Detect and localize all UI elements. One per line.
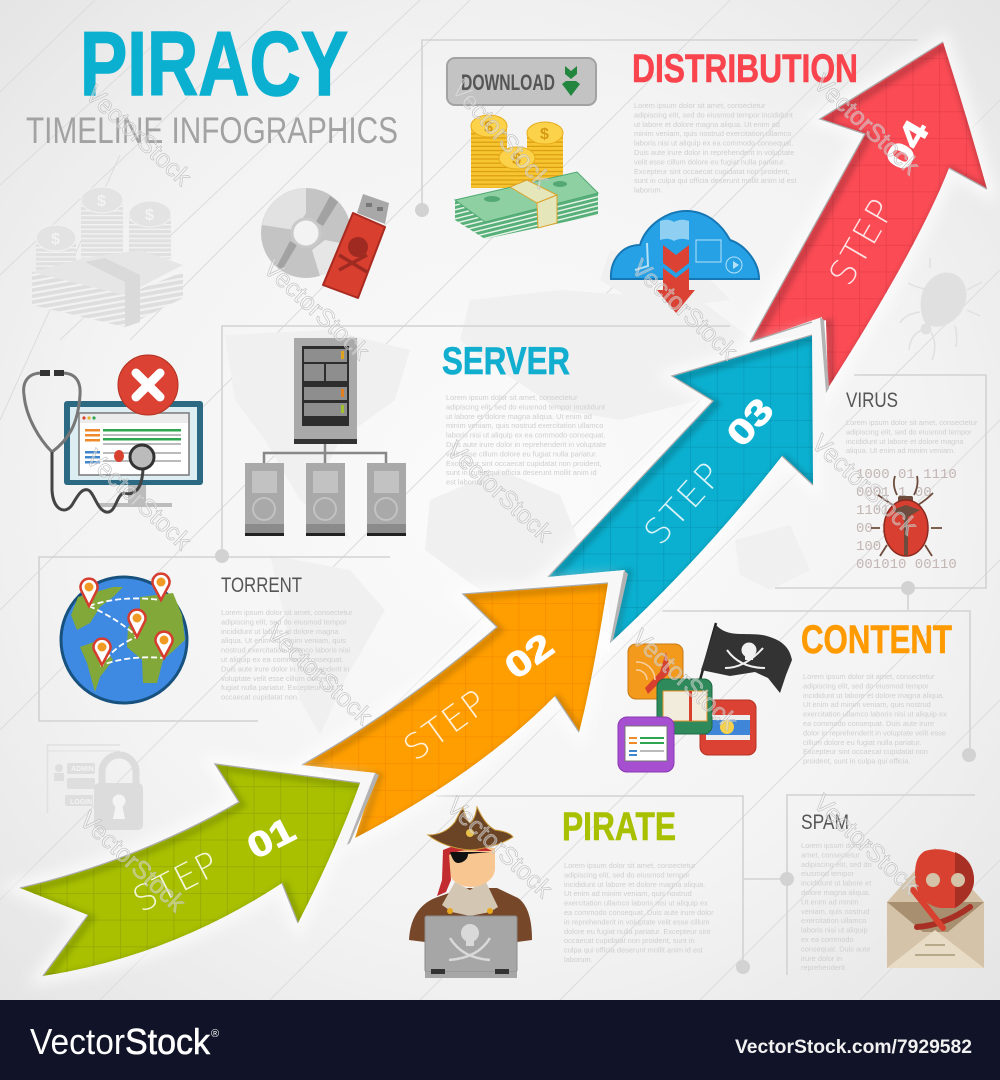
text: pirate: dolore eu fugiat nulla pariatur. Excepteur sint (564, 927, 710, 936)
text: server: sunt in culpa qui officia deserunt mollit anim id (446, 468, 597, 477)
text: torrent: aliqua. Ut enim ad minim veniam, quis (221, 636, 346, 645)
ghost icon: money (32, 187, 183, 327)
text: torrent: Lorem ipsum dolor sit amet, consectetur (221, 608, 353, 617)
watermarks: VectorStock (441, 436, 558, 548)
watermarks: VectorStock (80, 444, 197, 556)
usb (323, 194, 389, 298)
watermarks (74, 69, 925, 918)
text: distribution: Excepteur sint occaecat cupidatat non proident, (634, 167, 790, 176)
coins: $ (484, 119, 493, 136)
subtitle: TIMELINE INFOGRAPHICS (26, 110, 398, 151)
text: server: Duis aute irure dolor in reprehenderit in voluptate (446, 440, 606, 449)
text: content: dolor in reprehenderit in voluptate velit esse (803, 728, 946, 737)
watermarks: VectorStock (626, 624, 743, 736)
text: server: Excepteur sint occaecat cupidatat non proident, (446, 459, 602, 468)
arrow: step 01 green (15, 760, 379, 980)
heading: spam: SPAM (801, 811, 849, 834)
watermarks: VectorStock (74, 806, 191, 918)
step number: 01 (241, 810, 301, 867)
map pins (80, 574, 172, 665)
pirate hat (428, 807, 513, 850)
icon: pirate flag (700, 623, 792, 693)
text: content: proident, sunt in culpa qui officia. (803, 757, 911, 766)
step number: 03 (719, 391, 782, 454)
text: spam: exercitation ullamco (801, 916, 866, 925)
text: virus: aliqua. Ut enim ad minim veniam. (846, 446, 955, 455)
app: video (700, 700, 756, 755)
arrow: step 02 orange (295, 570, 628, 845)
text: distribution: minim veniam, quis nostrud exercitation ullamco (634, 129, 791, 138)
binary code: 1101 010 (856, 503, 923, 519)
footer bar (0, 1000, 1000, 1080)
text: spam: reprehenderit. (801, 963, 847, 972)
icon: download button: DOWNLOAD (461, 70, 555, 95)
footer bar: VectorStock.com/7929582 (735, 1037, 972, 1058)
text: spam: incididunt ut labore et (801, 879, 871, 888)
watermarks: VectorStock (808, 789, 925, 901)
text: pirate: ea commodo consequat. Duis aute irure dolor (564, 908, 714, 917)
watermarks: VectorStock (441, 792, 558, 904)
step label: STEP (637, 456, 730, 553)
text: distribution: Duis aute irure dolor in reprehenderit in voluptate (634, 148, 794, 157)
text: torrent: occaecat cupidatat non. (221, 693, 299, 702)
binary code: 001010 00110 (856, 557, 957, 573)
text: server: minim veniam, quis nostrud exercitation ullamco (446, 421, 603, 430)
text: spam: irure dolor in (801, 954, 842, 963)
heading: server: SERVER (442, 340, 570, 383)
text: pirate: Ut enim ad minim veniam, quis nostrud (564, 889, 692, 898)
text: content: Lorem ipsum dolor sit amet, consectetur (803, 672, 935, 681)
text: virus: Lorem ipsum dolor sit amet, consectetur (846, 418, 978, 427)
text: pirate: laborum. (564, 955, 593, 964)
text: server: Lorem ipsum dolor sit amet, consectetur (446, 393, 578, 402)
text: server: adipiscing elit, sed do eiusmod tempor incididunt (446, 402, 605, 411)
watermarks: VectorStock (808, 69, 925, 181)
text: pirate: Lorem ipsum dolor sit amet, consectetur (564, 861, 696, 870)
text: spam: adipiscing elit, sed do (801, 860, 872, 869)
app: book (657, 679, 712, 734)
text: content: adipiscing elit, sed do eiusmod tempor (803, 681, 929, 690)
text: virus: adipiscing elit, sed do eiusmod tempor (846, 427, 972, 436)
watermarks: VectorStock (626, 254, 743, 366)
title: PIRACY (80, 14, 348, 115)
icon: cd and usb with skull (261, 188, 389, 298)
heading: pirate: PIRATE (562, 805, 676, 849)
ghost icon: money: $ (51, 231, 60, 248)
text: content: exercitation ullamco laboris nisi ut aliquip ex (803, 710, 947, 719)
ghost icon: login lock (48, 745, 143, 830)
text: distribution: Lorem ipsum dolor sit amet, consectetur (634, 101, 766, 110)
ghost icon: login lock: ADMIN (71, 766, 94, 773)
app: browser (618, 717, 674, 772)
text: pirate: occaecat cupidatat non proident, sunt in (564, 936, 695, 945)
text: content: ea commodo consequat. Duis aute irure (803, 719, 934, 728)
app: audio (628, 644, 683, 699)
coins: $ (512, 151, 521, 168)
icon: download button (447, 58, 596, 105)
icon: torrent globe (61, 574, 187, 703)
text: pirate: adipiscing elit, sed do eiusmod tempor (564, 870, 690, 879)
text: virus: incididunt ut labore et dolore magna (846, 437, 964, 446)
binary code: 00 1000 (856, 521, 915, 537)
text: spam: laboris nisi ut aliquip (801, 926, 868, 935)
text: pirate: culpa qui officia deserunt mollit anim id est (564, 946, 703, 955)
step label: STEP (127, 845, 225, 921)
footer bar: Stock (125, 1021, 211, 1062)
text: torrent: fugiat nulla pariatur. Excepteur sint (221, 683, 334, 692)
icon: cloud download (611, 211, 759, 313)
text: pirate: in reprehenderit in voluptate velit esse cillum (564, 917, 709, 926)
text: server: ut labore et dolore magna aliqua. Ut enim ad (446, 412, 592, 421)
text: server: velit esse cillum dolore eu fugiat nulla pariatur. (446, 449, 597, 458)
binary code: 100 011 (856, 539, 915, 555)
ghost icon: bug (900, 258, 982, 360)
text: torrent: voluptate velit esse cillum dolore eu (221, 674, 338, 683)
ghost icon: money: $ (97, 193, 106, 210)
heading: content: CONTENT (801, 618, 952, 662)
icon: pirate with laptop (409, 807, 532, 978)
text: torrent: incididunt ut labore et dolore magna (221, 627, 339, 636)
red x badge (118, 355, 178, 415)
text: content: incididunt ut labore et dolore magna aliqua. (803, 691, 944, 700)
banknotes (455, 172, 598, 239)
ghost icon: login lock: LOGIN (70, 799, 92, 806)
text: spam: eiusmod tempor (801, 869, 855, 878)
stethoscope (24, 373, 143, 512)
text: torrent: ut aliquip ex ea commodo consequat. (221, 655, 343, 664)
laptop (425, 916, 517, 978)
text: content: Ut enim ad minim veniam, quis nostrud (803, 700, 931, 709)
ghost icon: money: $ (145, 207, 154, 224)
title (26, 14, 398, 151)
heading: distribution: DISTRIBUTION (632, 47, 858, 91)
heading: torrent: TORRENT (221, 574, 302, 597)
watermarks: VectorStock (80, 80, 197, 192)
text: torrent: nostrud exercitation ullamco laboris nisi (221, 646, 350, 655)
text: torrent: Duis aute irure dolor in reprehenderit in (221, 664, 349, 673)
text: distribution: laboris nisi ut aliquip ex ea commodo consequat. (634, 139, 793, 148)
text: distribution: velit esse cillum dolore eu fugiat nulla pariatur. (634, 157, 785, 166)
text: spam: Lorem ipsum dolor sit (801, 841, 872, 850)
heading: virus: VIRUS (846, 389, 898, 412)
tower 3 (367, 463, 406, 536)
tower 1 (245, 463, 284, 536)
rack (294, 338, 357, 444)
step label: STEP (397, 683, 495, 769)
icon: monitor diagnosis (24, 355, 203, 512)
text: torrent: adipiscing elit, sed do eiusmod tempor (221, 617, 347, 626)
icon: server rack and towers (245, 338, 406, 536)
text: spam: consequat. Duis aute (801, 944, 870, 953)
tower 2 (306, 463, 345, 536)
text: server: est laborum. (446, 478, 487, 487)
icon: ladybug (871, 476, 942, 556)
world map (225, 250, 810, 735)
arrow: step 04 red (750, 37, 992, 387)
step number: 02 (498, 626, 561, 687)
text: content: cillum dolore eu fugiat nulla pariatur. (803, 738, 921, 747)
text: spam: amet, consectetur (801, 850, 860, 859)
footer bar: Vector (30, 1021, 125, 1062)
text: spam: dolore magna aliqua. (801, 888, 870, 897)
coins: $ (540, 126, 549, 143)
text: pirate: incididunt ut labore et dolore magna aliqua. (564, 880, 705, 889)
text: distribution: laborum. (634, 186, 663, 195)
binary code: 1000 01 1110 (856, 467, 957, 483)
text: pirate: exercitation ullamco laboris nisi ut aliquip ex (564, 899, 708, 908)
text: spam: ex ea commodo (801, 935, 854, 944)
text: distribution: adipiscing elit, sed do eiusmod tempor incididunt (634, 110, 793, 119)
watermarks: VectorStock (446, 75, 556, 194)
watermarks: VectorStock (806, 429, 923, 541)
cd (261, 188, 351, 278)
text: spam: veniam, quis nostrud (801, 907, 869, 916)
watermarks: VectorStock (261, 619, 378, 731)
icon: coins and money (455, 115, 598, 239)
arrow: step 03 blue (540, 317, 829, 650)
coins (471, 115, 563, 188)
binary code: 0001 1 00 (856, 485, 932, 501)
text: distribution: ut labore et dolore magna aliqua. Ut enim ad (634, 120, 780, 129)
text: distribution: sunt in culpa qui officia deserunt mollit anim id est (634, 176, 797, 185)
step label: STEP (822, 193, 903, 292)
icons: content apps (618, 644, 756, 772)
text: spam: Ut enim ad minim (801, 897, 858, 906)
step number: 04 (878, 113, 937, 177)
footer bar: ® (211, 1028, 219, 1040)
text: server: laboris nisi ut aliquip ex ea commodo consequat. (446, 431, 605, 440)
watermarks: VectorStock (258, 254, 375, 366)
text: content: Excepteur sint occaecat cupidatat non (803, 747, 928, 756)
icon: spam envelope with skull (887, 848, 984, 968)
